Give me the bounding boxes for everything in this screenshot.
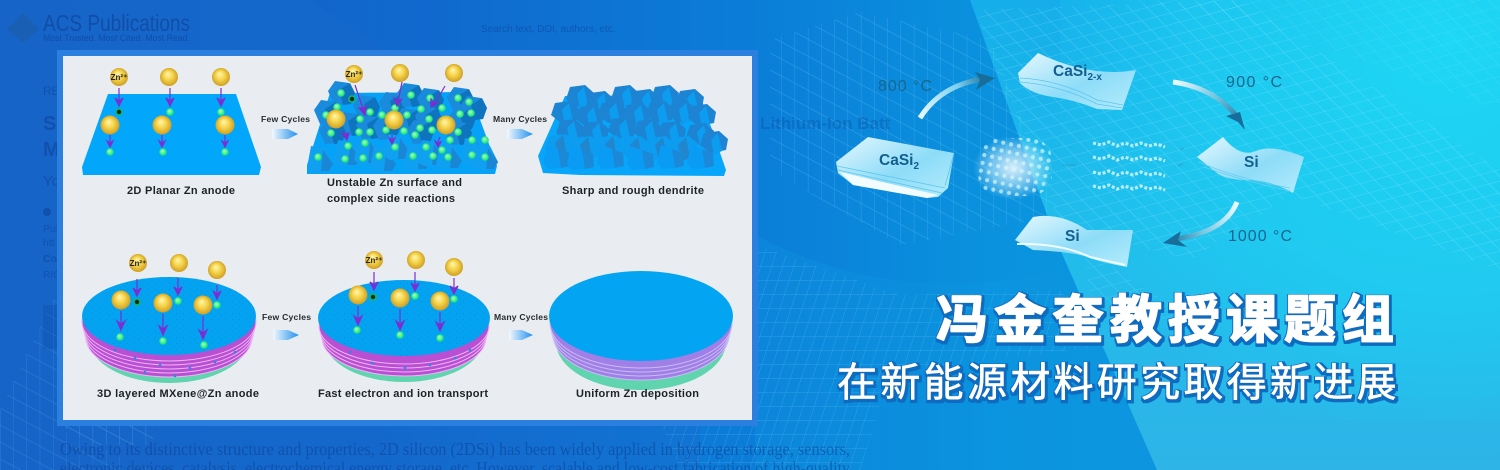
label: 3D layered: 3D layered MXene@Zn anode: [97, 388, 259, 400]
ghost page: article abstract: [60, 439, 850, 470]
label: fast transport: Fast electron and ion transport: [318, 388, 488, 400]
ghost page: article header fragments: S: [43, 113, 56, 135]
flow arrow: many cycles 2: Many Cycles: [494, 312, 548, 322]
ghost page: ACS logo: ACS Publications: [43, 10, 190, 36]
panel background: [63, 56, 752, 420]
sheet: CaSi2: [836, 137, 954, 198]
ghost page: article header fragments: Co: [43, 253, 57, 265]
2D planar Zn anode: [82, 68, 261, 175]
subtitle: 在新能源材料研究取得新进展: [837, 361, 1400, 405]
label: unstable surface: complex side reactions: [327, 193, 455, 205]
process diagram: silicon synthesis: [836, 53, 1304, 267]
sheet: CaSi2: CaSi: [879, 152, 913, 169]
arrow: 1000 C step: [1163, 202, 1237, 247]
label: 2D planar: 2D Planar Zn anode: [127, 185, 235, 197]
label: dendrite: Sharp and rough dendrite: [562, 185, 704, 197]
sheet: CaSi2-x: [1018, 53, 1136, 110]
ghost page: article header fragments: htt: [43, 237, 55, 249]
sheet: Si layered: Si: [1244, 154, 1259, 171]
fast electron and ion transport: Zn²⁺: [366, 256, 382, 265]
label: unstable surface: [327, 177, 462, 205]
label: uniform: Uniform Zn deposition: [576, 388, 699, 400]
unstable Zn surface: [307, 64, 498, 174]
background light wedge top left: [0, 0, 700, 470]
flow arrow: many cycles 1: [493, 114, 547, 139]
flow arrow: few cycles 1: [261, 114, 310, 139]
sheet: Si layered: [1197, 137, 1304, 193]
unstable Zn surface: Zn²⁺: [346, 70, 362, 79]
ghost page: article abstract: Owing to its distinctive structure and properties, 2D silicon (2DSi) has been widely applied in hydrogen storage, sensors,: [60, 439, 850, 460]
ghost page: article header fragments: RIG: [43, 270, 61, 281]
sheet: Si bottom: [1015, 216, 1133, 267]
temperature: 900: 900 °C: [1226, 74, 1282, 91]
2D planar Zn anode: Zn²⁺: [111, 73, 127, 82]
ghost page: article header fragments: Pul: [43, 223, 58, 235]
arrow: 900 C step: [1173, 82, 1245, 130]
flow arrow: many cycles 1: Many Cycles: [493, 114, 547, 124]
sharp rough dendrite: [538, 85, 728, 176]
sheet: Si bottom: Si: [1065, 228, 1080, 245]
sheet: CaSi2-x: CaSi: [1053, 63, 1087, 80]
layered atom chains: [1093, 142, 1165, 190]
small connectors: [961, 148, 1184, 166]
title: 冯金奎教授课题组: [936, 292, 1400, 350]
panel frame: [57, 50, 758, 426]
fast electron and ion transport: [318, 251, 490, 382]
temperature: 800: 800 °C: [878, 78, 932, 95]
flow arrow: few cycles 2: Few Cycles: [262, 312, 311, 322]
ghost page: ACS logo: [7, 10, 190, 43]
arrow: 800 C step: [920, 72, 995, 118]
temperature: 1000: 1000 °C: [1228, 228, 1292, 245]
ghost page: search box text: Search text, DOI, authors, etc.: [481, 24, 616, 35]
ghost page: article header fragments: [43, 84, 61, 349]
flow arrow: many cycles 2: [494, 312, 548, 340]
background right wedge: [970, 0, 1500, 470]
label: unstable surface: Unstable Zn surface and: [327, 177, 462, 189]
background cyan corner glow: [1060, 0, 1500, 420]
sheet: CaSi2: 2: [913, 161, 919, 172]
3D layered MXene@Zn anode: [82, 254, 256, 383]
ghost page: lithium-ion heading: Lithium-Ion Batt: [760, 114, 891, 133]
panel: zinc anode schematic: [57, 50, 758, 426]
ghost page: article header fragments: Yo: [43, 173, 60, 190]
background dark arc: [755, 235, 1157, 470]
uniform Zn deposition: [549, 271, 733, 390]
flow arrow: few cycles 2: [262, 312, 311, 340]
flow arrow: few cycles 1: Few Cycles: [261, 114, 310, 124]
ghost page: article header fragments: RE: [43, 84, 60, 98]
ghost page: article header fragments: M: [43, 139, 60, 161]
atom lattice cluster: [973, 136, 1053, 200]
3D layered MXene@Zn anode: Zn²⁺: [130, 259, 146, 268]
ghost page: ACS logo: Most Trusted. Most Cited. Most Read.: [43, 33, 190, 43]
sheet: CaSi2-x: 2-x: [1087, 72, 1102, 83]
